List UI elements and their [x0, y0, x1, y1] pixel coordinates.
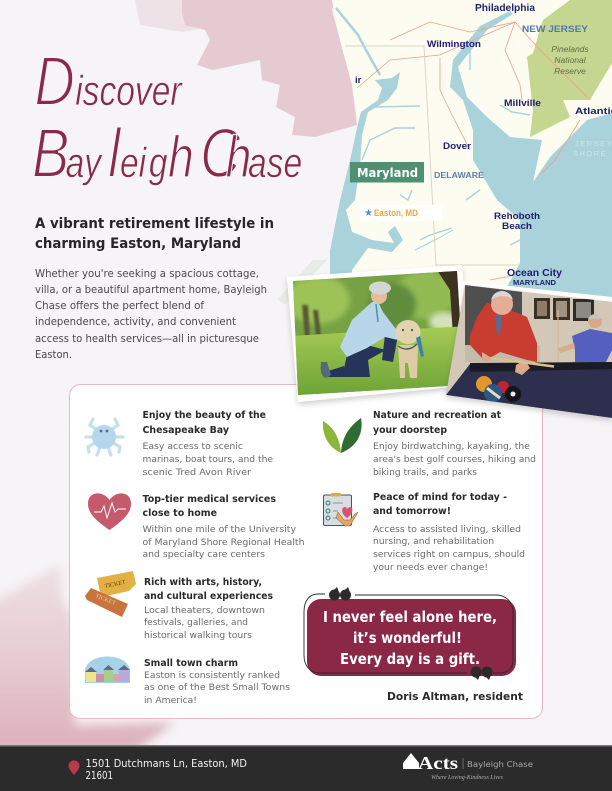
- map: place labels: Dover: [443, 141, 471, 152]
- text: nature and recreation: Nature and recreation at: [373, 410, 501, 421]
- text: peace of mind: services right on campus, should: [373, 550, 525, 560]
- footer bar: [0, 745, 612, 791]
- text: Chesapeake Bay: [142, 410, 273, 478]
- map: place labels: MARYLAND: [513, 280, 556, 287]
- map: place labels: NEW JERSEY: [522, 24, 589, 35]
- map: place labels: Reserve: [554, 66, 586, 76]
- icon: opening quote marks: [329, 587, 351, 600]
- title: ay: [66, 141, 103, 187]
- text: peace of mind: your needs ever change!: [373, 563, 488, 573]
- text: address: 21601: [86, 770, 113, 782]
- text: attribution: Doris Altman, resident: [387, 690, 523, 703]
- text: address: 1501 Dutchmans Ln, Easton, MD: [86, 758, 247, 770]
- text: peace of mind: nursing, and rehabilitation: [373, 537, 494, 547]
- map: place labels: Millville: [504, 98, 541, 109]
- icon: crab: [86, 419, 123, 455]
- text: nature and recreation: Enjoy birdwatching, kayaking, the: [373, 442, 530, 452]
- woman: [344, 346, 384, 377]
- title: D: [34, 43, 75, 120]
- title: C: [200, 115, 242, 192]
- subheading: A vibrant retirement lifestyle in: [35, 216, 274, 232]
- icon: tickets: TICKET: [94, 593, 117, 607]
- text: arts and history: and cultural experiences: [144, 591, 273, 602]
- callout: testimonial quote: Every day is a gift.: [340, 650, 480, 668]
- text: peace of mind: [373, 492, 525, 573]
- map: place labels: [355, 2, 612, 287]
- second man: [557, 310, 559, 362]
- map: [328, 0, 612, 305]
- text: nature and recreation: biking trails, and parks: [373, 468, 477, 478]
- map: place labels: ★: [364, 208, 373, 219]
- icon: closing quote marks: [470, 666, 492, 680]
- intro paragraph: villa, or a beautiful apartment home, Bayleigh: [35, 284, 267, 296]
- title: g: [149, 141, 167, 187]
- logo: Acts Bayleigh Chase: Acts: [418, 753, 458, 773]
- map: chesapeake water: [330, 72, 403, 274]
- text: arts and history: historical walking tours: [144, 631, 252, 641]
- text: medical services: of Maryland Shore Regional Health: [142, 538, 304, 548]
- intro paragraph: Easton.: [35, 349, 72, 361]
- map: place labels: Ocean City: [507, 267, 562, 279]
- intro paragraph: access to health services—all in picturesque: [35, 333, 259, 345]
- watercolor wash: bottom left: [0, 565, 175, 752]
- map: bay and ocean water: [450, 11, 612, 305]
- icon: tickets: [85, 571, 136, 617]
- callout: testimonial quote: it’s wonderful!: [353, 629, 462, 647]
- text: Chesapeake Bay: Enjoy the beauty of the: [142, 410, 266, 421]
- map: place labels: Easton, MD: [374, 208, 418, 218]
- text: medical services: and specialty care centers: [142, 550, 265, 560]
- map: roads and borders: [357, 22, 590, 280]
- text: medical services: close to home: [142, 508, 217, 519]
- subheading: charming Easton, Maryland: [35, 236, 241, 252]
- panel: features card: [70, 384, 542, 718]
- map label: Maryland: [350, 162, 424, 182]
- text: small town charm: in America!: [144, 696, 197, 706]
- text: Chesapeake Bay: scenic Tred Avon River: [142, 468, 251, 478]
- subheading: [35, 216, 274, 252]
- watercolor wash: top: [135, 0, 357, 137]
- text: small town charm: Easton is consistently ranked: [144, 671, 280, 681]
- text: arts and history: Rich with arts, history,: [144, 577, 262, 588]
- intro paragraph: independence, activity, and convenient: [35, 316, 236, 328]
- logo: Acts Bayleigh Chase: Bayleigh Chase: [467, 760, 533, 769]
- text: Chesapeake Bay: marinas, boat tours, and the: [142, 455, 273, 465]
- billiard balls: [476, 376, 492, 392]
- intro paragraph: [35, 268, 267, 361]
- text: small town charm: [144, 658, 290, 706]
- map label: Maryland: Maryland: [357, 166, 418, 180]
- callout: testimonial quote: [304, 587, 516, 680]
- icon: heart: [88, 493, 131, 530]
- title: h: [226, 125, 251, 190]
- dog: [398, 345, 418, 378]
- text: nature and recreation: [373, 410, 536, 478]
- text: arts and history: Local theaters, downtown: [144, 606, 265, 616]
- text: peace of mind: and tomorrow!: [373, 506, 451, 517]
- title: h: [168, 125, 194, 190]
- text: address: [86, 758, 247, 782]
- decorative tape: [277, 260, 327, 304]
- map: place labels: Atlantic: [575, 106, 612, 117]
- title: ei: [120, 141, 148, 187]
- title: l: [108, 115, 122, 192]
- title: iscover: [75, 69, 183, 115]
- map: pinelands green: [527, 0, 612, 137]
- intro paragraph: Chase offers the perfect blend of: [35, 300, 204, 312]
- text: medical services: Within one mile of the University: [142, 525, 296, 535]
- photo: billiards: [440, 280, 612, 425]
- text: medical services: Top-tier medical services: [142, 494, 276, 505]
- map: place labels: ir: [355, 75, 362, 86]
- intro paragraph: Whether you're seeking a spacious cottage,: [35, 268, 259, 280]
- photo: woman with dog: [285, 265, 470, 402]
- map: place labels: National: [554, 55, 587, 65]
- wall frames: [534, 298, 550, 319]
- text: arts and history: [144, 577, 273, 641]
- text: small town charm: as one of the Best Small Towns: [144, 683, 290, 693]
- map: rivers: [336, 8, 530, 250]
- map: place labels: DELAWARE: [434, 171, 485, 180]
- text: medical services: [142, 494, 304, 560]
- text: Chesapeake Bay: Easy access to scenic: [142, 442, 243, 452]
- logo: Acts Bayleigh Chase: Where Loving-Kindness Lives: [431, 774, 503, 781]
- icon: clipboard and heart: [324, 493, 358, 526]
- text: arts and history: festivals, galleries, and: [144, 618, 248, 628]
- icon: tickets: TICKET: [104, 580, 127, 590]
- icon: location pin: [68, 761, 80, 775]
- text: nature and recreation: area's best golf courses, hiking and: [373, 455, 536, 465]
- cue: [490, 358, 554, 366]
- man in red: [470, 303, 537, 362]
- logo: Acts Bayleigh Chase: [403, 753, 533, 781]
- text: Chesapeake Bay: Chesapeake Bay: [142, 425, 230, 436]
- text: small town charm: Small town charm: [144, 658, 238, 669]
- text: nature and recreation: your doorstep: [373, 425, 447, 436]
- map: place labels: Beach: [502, 221, 532, 232]
- title: ase: [248, 141, 302, 187]
- map: place labels: Wilmington: [427, 39, 481, 50]
- icon: leaves: [323, 418, 362, 453]
- map: place labels: Philadelphia: [475, 2, 535, 14]
- title: B: [32, 115, 69, 192]
- icon: town: [85, 656, 130, 683]
- map: place labels: Pinelands: [551, 44, 589, 54]
- table: [446, 362, 612, 418]
- map: place labels: SHORE: [573, 149, 607, 158]
- title: [32, 43, 302, 192]
- map: place labels: Rehoboth: [494, 211, 540, 222]
- callout: testimonial quote: I never feel alone here,: [323, 608, 497, 626]
- text: peace of mind: Peace of mind for today -: [373, 492, 507, 503]
- text: peace of mind: Access to assisted living, skilled: [373, 525, 521, 535]
